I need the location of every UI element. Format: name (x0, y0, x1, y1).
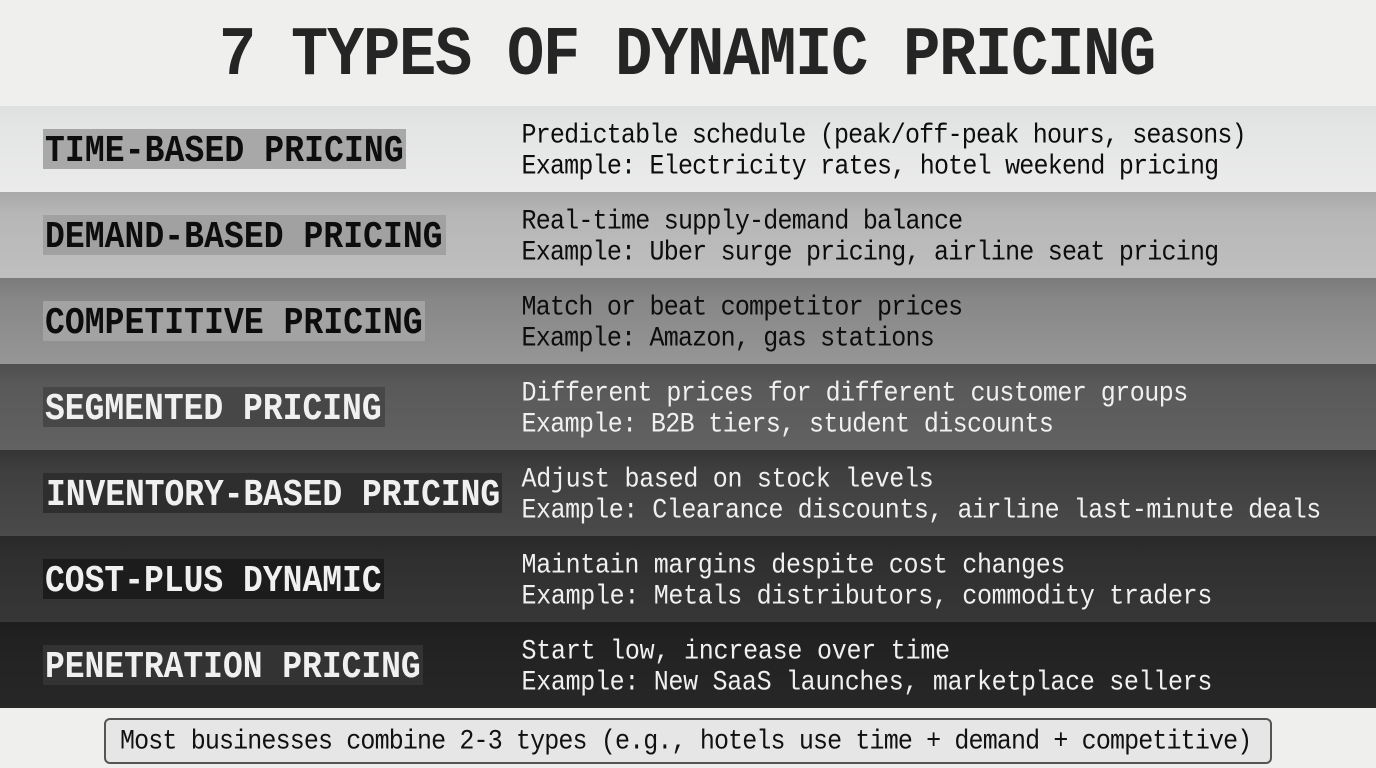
panel: competitive pricing (0, 278, 1376, 364)
text: time-based description: Predictable schedule (peak/off-peak hours, seasons) (522, 120, 1246, 151)
text: cost-plus description: Example: Metals distributors, commodity traders (522, 581, 1212, 612)
panel: time-based pricing (0, 106, 1376, 192)
text: penetration description: Start low, increase over time (522, 636, 950, 667)
panel: demand-based pricing (0, 192, 1376, 278)
text: competitive description: Match or beat competitor prices (522, 292, 962, 323)
text: segmented description (522, 378, 1188, 440)
heading: penetration pricing: PENETRATION PRICING (45, 646, 421, 688)
text: competitive description: Example: Amazon, gas stations (522, 323, 934, 354)
text: segmented description: Different prices for different customer groups (522, 378, 1188, 409)
title: 7 TYPES OF DYNAMIC PRICING (219, 16, 1155, 95)
text: inventory-based description: Example: Clearance discounts, airline last-minute deals (522, 495, 1321, 526)
text: demand-based description: Real-time supply-demand balance (522, 206, 962, 237)
callout: combine types note: Most businesses combine 2-3 types (e.g., hotels use time + demand + competitive) (120, 726, 1251, 757)
text: demand-based description: Example: Uber surge pricing, airline seat pricing (522, 237, 1218, 268)
heading: cost-plus dynamic: COST-PLUS DYNAMIC (45, 560, 382, 602)
text: competitive description (522, 292, 962, 354)
text: segmented description: Example: B2B tiers, student discounts (522, 409, 1053, 440)
text: inventory-based description (522, 464, 1321, 526)
text: cost-plus description: Maintain margins despite cost changes (522, 550, 1065, 581)
text: penetration description: Example: New SaaS launches, marketplace sellers (522, 667, 1212, 698)
panel: cost-plus dynamic (0, 536, 1376, 622)
text: time-based description (522, 120, 1246, 182)
panel: penetration pricing (0, 622, 1376, 708)
text: cost-plus description (522, 550, 1212, 612)
heading: time-based pricing: TIME-BASED PRICING (45, 130, 404, 172)
text: time-based description: Example: Electricity rates, hotel weekend pricing (522, 151, 1218, 182)
heading: inventory-based pricing: INVENTORY-BASED PRICING (46, 474, 500, 516)
panel: segmented pricing (0, 364, 1376, 450)
heading: demand-based pricing: DEMAND-BASED PRICING (45, 216, 443, 258)
title (0, 0, 1376, 106)
callout: combine types note (104, 718, 1272, 764)
panel: inventory-based pricing (0, 450, 1376, 536)
heading: segmented pricing: SEGMENTED PRICING (45, 388, 382, 430)
text: penetration description (522, 636, 1212, 698)
text: inventory-based description: Adjust based on stock levels (522, 464, 933, 495)
heading: competitive pricing: COMPETITIVE PRICING (45, 302, 423, 344)
text: demand-based description (522, 206, 1218, 268)
